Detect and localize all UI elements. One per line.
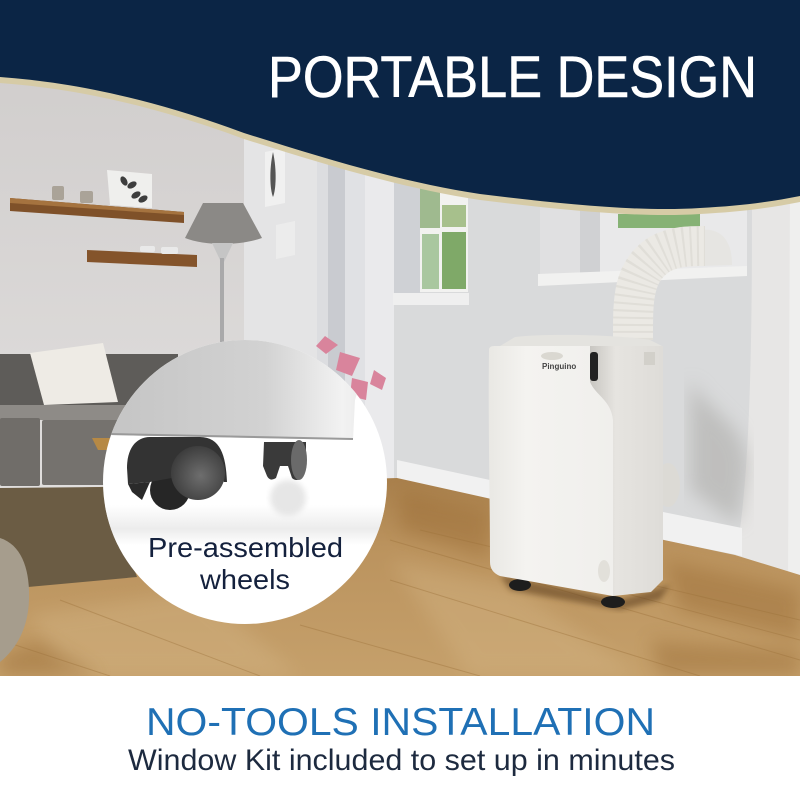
shelf top (10, 170, 184, 223)
baseboard (397, 460, 742, 556)
pillow (30, 343, 118, 405)
window right with kit (538, 205, 747, 286)
unit underside (112, 340, 357, 439)
sofa (0, 354, 178, 486)
window sill (538, 266, 747, 286)
portable air conditioner: Pinguino (542, 362, 576, 371)
small wheel (263, 440, 307, 480)
banner (0, 0, 800, 215)
curtain shadow on wall (690, 380, 748, 525)
unit top (500, 335, 662, 346)
reflection (270, 480, 306, 516)
large wheel (127, 437, 227, 510)
bottom white band (0, 676, 800, 800)
navy shape (0, 0, 800, 209)
left wall (0, 70, 244, 490)
portable air conditioner (489, 335, 670, 610)
side table (92, 438, 112, 450)
curtains by window (317, 150, 394, 480)
flowers (316, 336, 386, 400)
callout circle: wheels: wheels (199, 564, 290, 595)
display (590, 352, 598, 381)
handle (644, 352, 655, 365)
art on shelf (107, 170, 152, 208)
hose (633, 230, 732, 340)
floor sheen (100, 505, 390, 545)
wall switch (276, 221, 295, 259)
caption: Window Kit included to set up in minutes (128, 744, 675, 777)
right wall (244, 130, 800, 560)
floor lamp (185, 203, 262, 348)
title: PORTABLE DESIGN (268, 45, 757, 110)
front panel (489, 346, 613, 596)
logo (541, 352, 563, 360)
wall art (265, 148, 285, 207)
subheading: NO-TOOLS INSTALLATION (146, 701, 655, 744)
wheels (509, 579, 531, 591)
window left (393, 175, 469, 305)
photo: room background (0, 70, 800, 676)
corner wall (244, 130, 317, 480)
shelf lower (87, 246, 197, 267)
rug (0, 487, 137, 587)
pouf (0, 538, 29, 662)
floor (0, 478, 800, 676)
callout circle: wheels (100, 335, 390, 624)
wood planks (0, 490, 800, 676)
unit shadow (500, 575, 670, 610)
right curtain (735, 195, 800, 578)
badge (598, 560, 610, 582)
rear exhaust ring (656, 463, 680, 507)
gold edge (0, 0, 800, 215)
callout text: Pre-assembled (148, 532, 343, 563)
side panel (590, 346, 663, 596)
window adapter (700, 230, 732, 266)
